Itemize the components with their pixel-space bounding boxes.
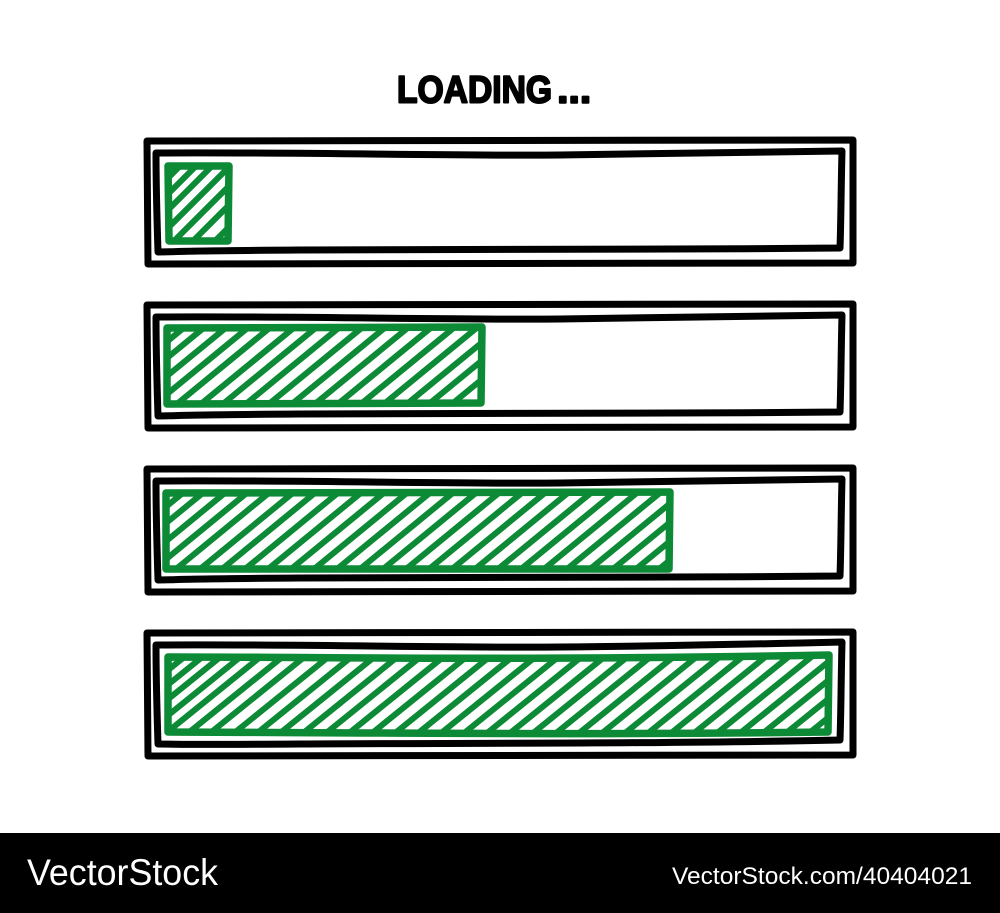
- bar frame outer: [147, 140, 853, 264]
- loading bar: about 75 percent: [84, 468, 853, 592]
- title: LOADING: [397, 70, 552, 112]
- green fill with hatching: [164, 651, 833, 738]
- bar frame inner: [156, 479, 842, 580]
- loading bar: about 10 percent: [147, 140, 853, 264]
- bar frame outer: [147, 632, 853, 756]
- green fill with hatching: [162, 488, 674, 573]
- green fill with hatching: [163, 323, 486, 408]
- footer image id text: VectorStock.com/40404021: [672, 863, 972, 890]
- loading bar: about 50 percent: [86, 304, 853, 428]
- green fill with hatching: [164, 162, 233, 245]
- bar frame inner: [156, 151, 842, 252]
- footer bar: [0, 833, 1000, 913]
- title: ...: [558, 70, 592, 112]
- bar frame outer: [147, 468, 853, 592]
- bar frame inner: [156, 642, 842, 744]
- footer logo text: VectorStock: [27, 852, 218, 893]
- loading bar: complete: [84, 632, 907, 756]
- bar frame inner: [156, 315, 842, 416]
- bar frame outer: [147, 304, 853, 428]
